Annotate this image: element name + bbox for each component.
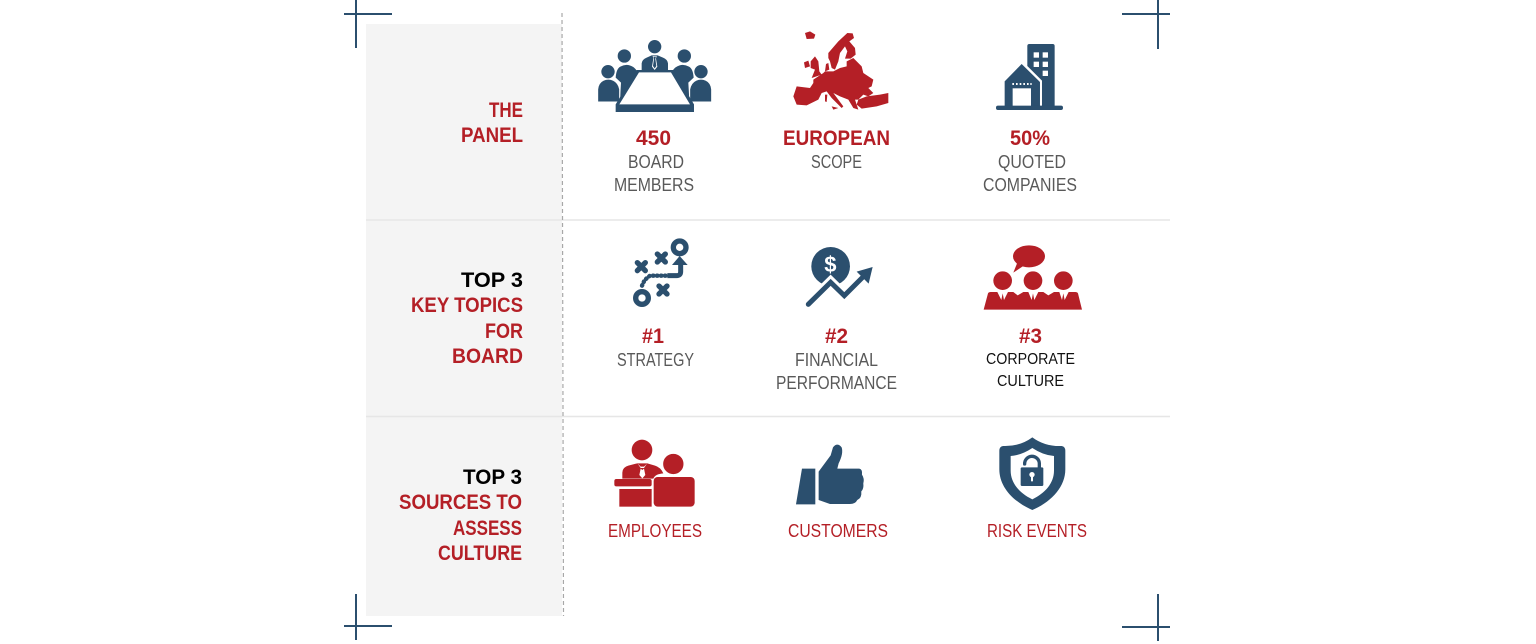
icon: boardroom meeting: [598, 40, 712, 112]
icon: map of Europe: [793, 31, 888, 110]
corner mark: top right: [1122, 0, 1170, 49]
heading: top 3 sources: CULTURE: [438, 542, 522, 565]
stat: #1 strategy: [617, 325, 694, 370]
heading: top 3 sources: [399, 466, 522, 565]
heading: top 3 sources: ASSESS: [453, 517, 522, 540]
stat: 450 board members: [614, 127, 694, 195]
heading: the panel: [461, 99, 523, 147]
stat: 450 board members: BOARD: [628, 152, 684, 172]
stat: #3 corporate culture: [986, 325, 1075, 390]
grey label column: [366, 24, 562, 616]
label: employees: EMPLOYEES: [608, 521, 702, 541]
icon: strategy play: [636, 241, 688, 304]
stat: #2 financial performance: [776, 325, 897, 393]
icon: company buildings: [996, 44, 1063, 110]
stat: european scope: [783, 127, 890, 172]
stat: #2 financial performance: FINANCIAL: [795, 350, 878, 370]
heading: the panel: THE: [489, 99, 523, 122]
stat: 50% quoted companies: QUOTED: [998, 152, 1066, 172]
icon: security shield: [999, 437, 1065, 510]
heading: top 3 key topics: TOP 3: [461, 269, 523, 292]
corner mark: bottom right: [1122, 594, 1170, 641]
label: risk events: RISK EVENTS: [987, 521, 1087, 541]
label: customers: CUSTOMERS: [788, 521, 888, 541]
stat: 50% quoted companies: [983, 127, 1077, 195]
heading: top 3 key topics: [411, 269, 523, 368]
heading: the panel: PANEL: [461, 124, 523, 147]
stat: 450 board members: 450: [636, 127, 671, 150]
stat: #1 strategy: #1: [642, 325, 664, 348]
icon: corporate culture group: [984, 245, 1082, 310]
stat: european scope: EUROPEAN: [783, 127, 890, 150]
heading: top 3 key topics: FOR: [485, 320, 523, 343]
corner mark: bottom left: [344, 594, 392, 640]
stat: #1 strategy: STRATEGY: [617, 350, 694, 370]
icon: financial growth: [808, 247, 873, 304]
stat: #3 corporate culture: CORPORATE: [986, 351, 1075, 368]
icon: thumbs up customers: [796, 445, 864, 504]
stat: #3 corporate culture: #3: [1019, 325, 1042, 348]
stat: 50% quoted companies: 50%: [1010, 127, 1050, 150]
icon: financial growth: $: [824, 252, 836, 277]
stat: european scope: SCOPE: [811, 152, 862, 172]
stat: #2 financial performance: #2: [825, 325, 848, 348]
heading: top 3 key topics: KEY TOPICS: [411, 294, 523, 317]
heading: top 3 sources: SOURCES TO: [399, 491, 522, 514]
icon: employees: [614, 440, 695, 507]
corner mark: top left: [344, 0, 392, 48]
heading: top 3 sources: TOP 3: [463, 466, 522, 489]
stat: #2 financial performance: PERFORMANCE: [776, 373, 897, 393]
stat: #3 corporate culture: CULTURE: [997, 373, 1064, 390]
stat: 450 board members: MEMBERS: [614, 175, 694, 195]
stat: 50% quoted companies: COMPANIES: [983, 175, 1077, 195]
heading: top 3 key topics: BOARD: [452, 345, 523, 368]
